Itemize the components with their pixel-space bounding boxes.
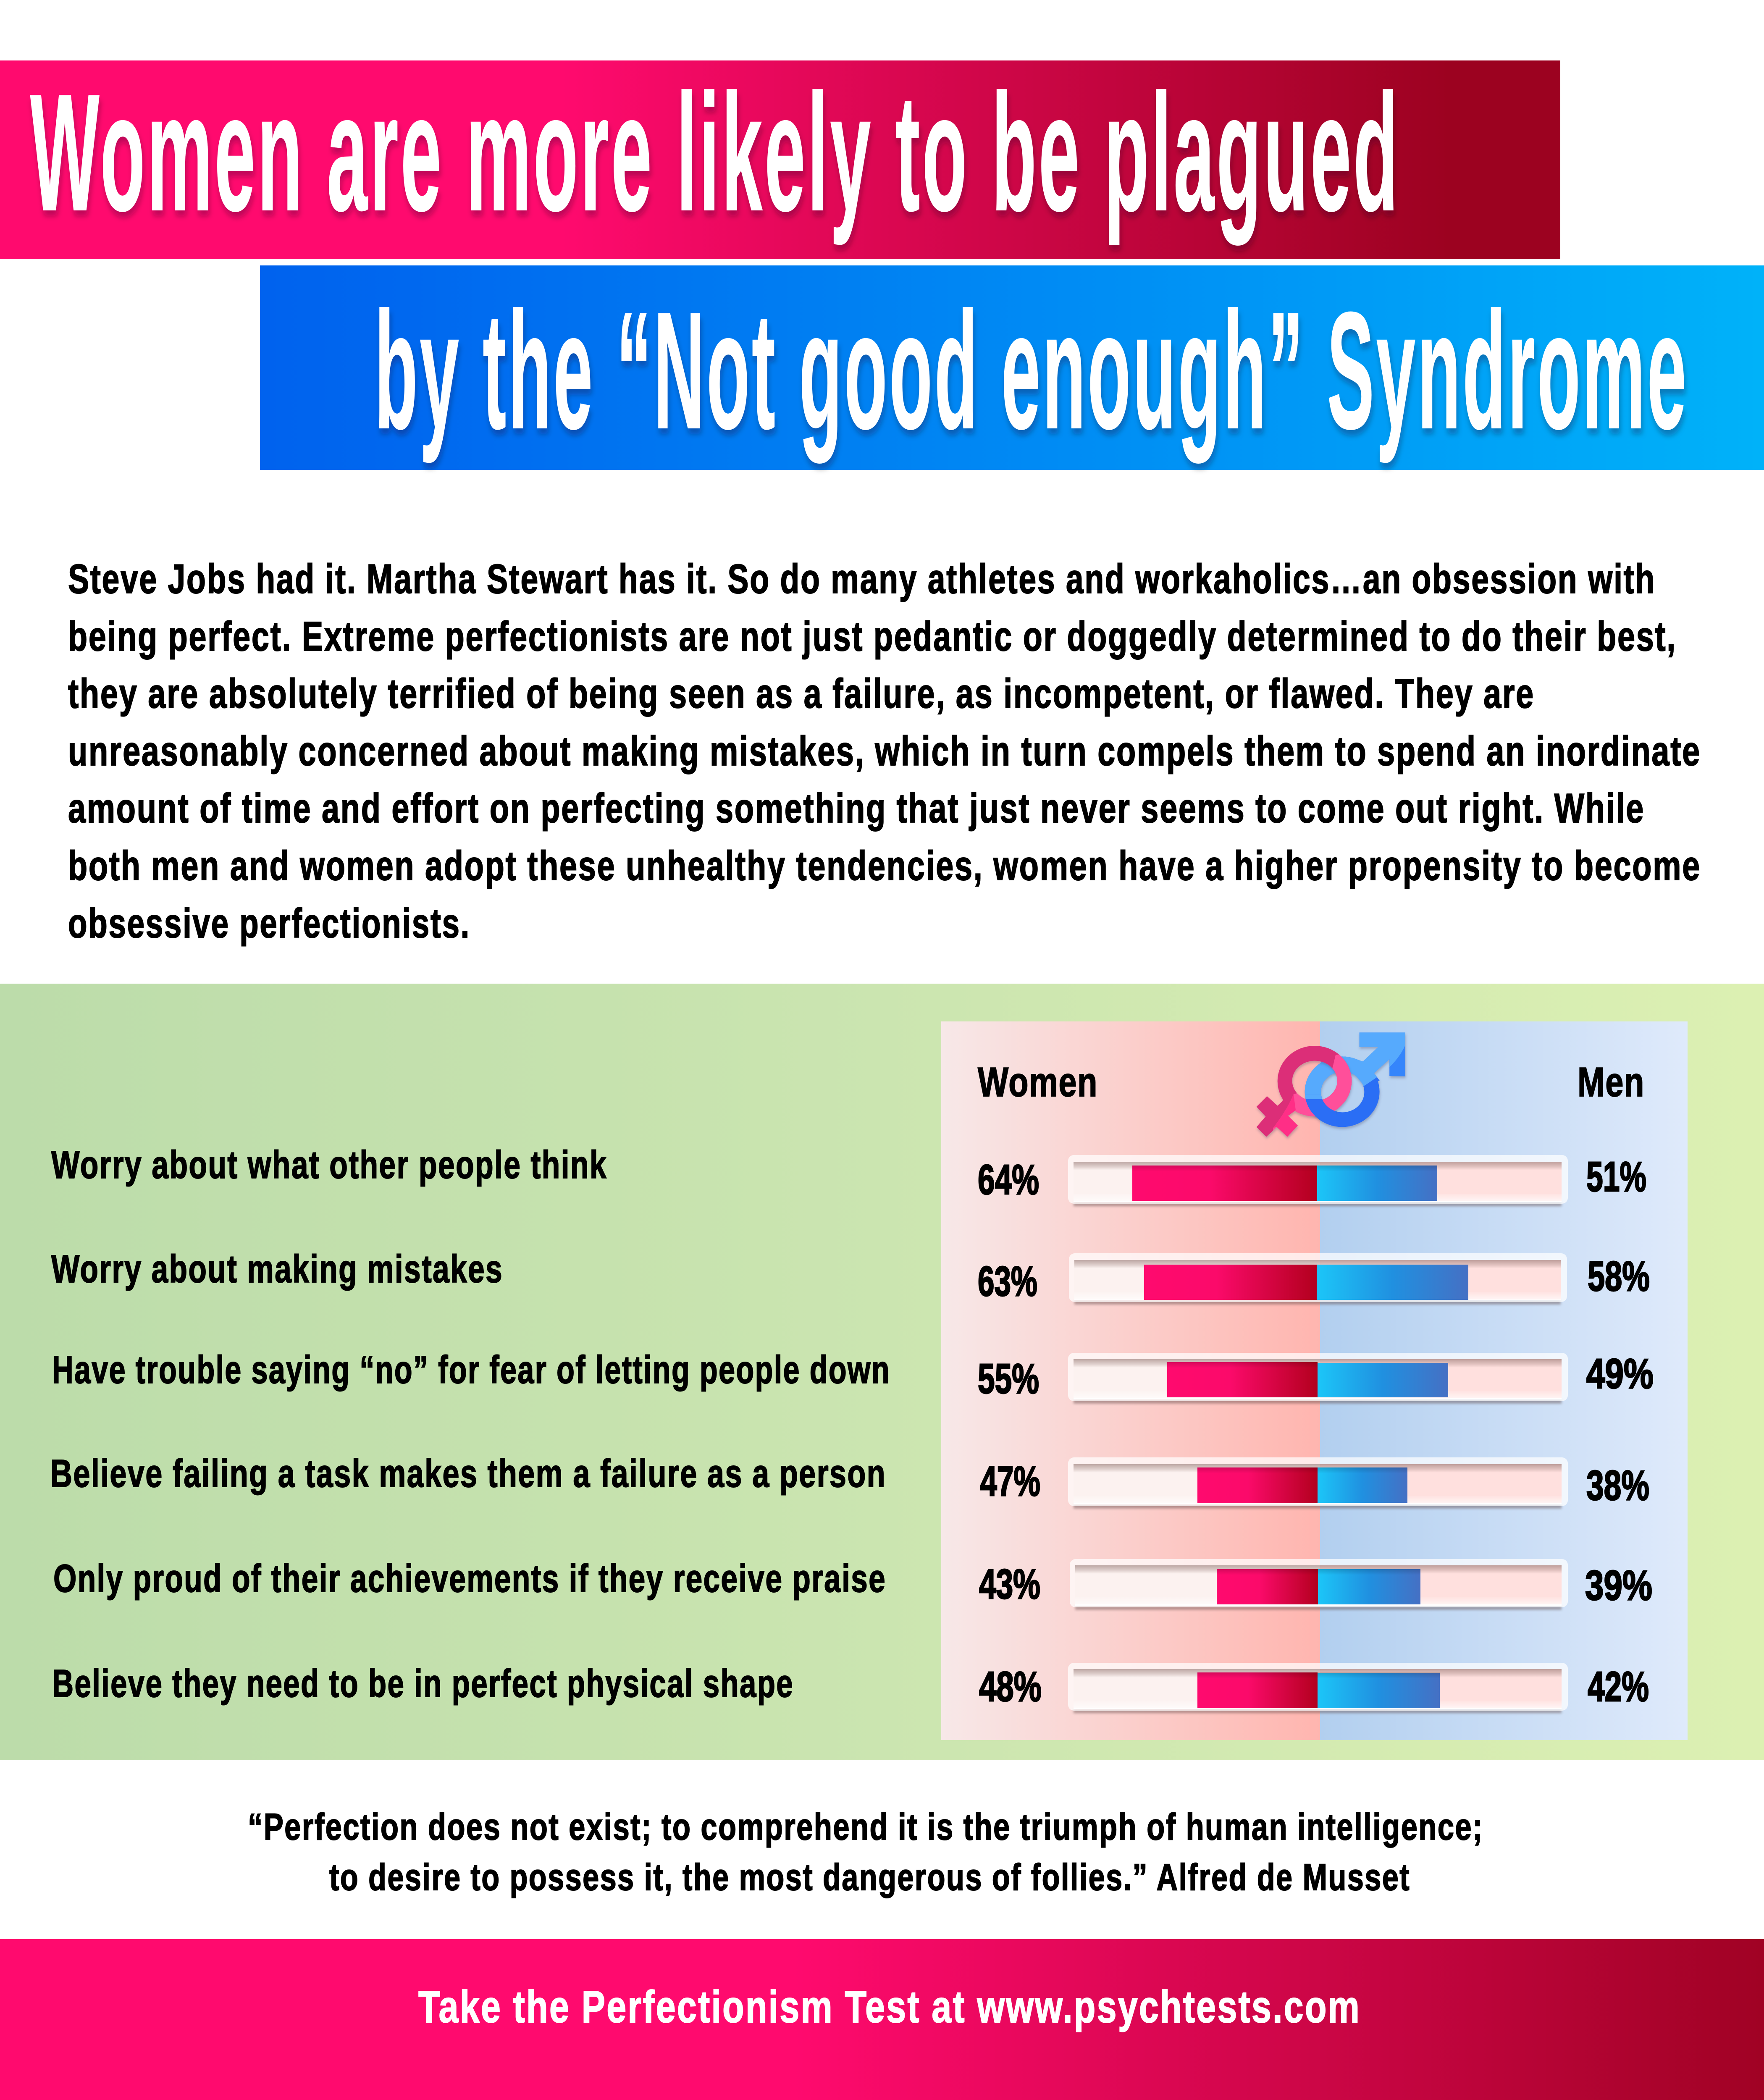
icon: interlocked female and male symbols	[1257, 1032, 1405, 1137]
women 47%: 47%	[980, 1458, 1040, 1505]
row 3: trouble saying no	[978, 1350, 1654, 1404]
intro paragraph	[68, 556, 1701, 946]
women 43%: 43%	[979, 1561, 1040, 1608]
bar 1	[1068, 1155, 1568, 1206]
quote by Alfred de Musset	[248, 1806, 1483, 1898]
men 51%: 51%	[1586, 1153, 1646, 1200]
statement labels	[50, 1143, 890, 1705]
bar 4	[1068, 1457, 1568, 1509]
women 63%: 63%	[978, 1258, 1037, 1305]
row 5: proud only with praise	[979, 1559, 1652, 1610]
quote by Alfred de Musset: “Perfection does not exist; to comprehend it is the triumph of human intelligence;	[248, 1806, 1483, 1848]
row 1: worry about what others think	[978, 1153, 1646, 1206]
intro paragraph: obsessive perfectionists.	[68, 900, 470, 946]
statement labels: Worry about making mistakes	[51, 1247, 503, 1291]
statement labels: Believe failing a task makes them a failure as a person	[50, 1452, 886, 1495]
women 64%: 64%	[978, 1156, 1039, 1203]
men 42%: 42%	[1588, 1663, 1649, 1710]
bar 6	[1068, 1663, 1568, 1713]
bar 5	[1070, 1559, 1568, 1610]
quote by Alfred de Musset: to desire to possess it, the most dangerous of follies.” Alfred de Musset	[329, 1856, 1410, 1898]
women 55%: 55%	[978, 1355, 1039, 1402]
panel: green survey section	[0, 984, 1764, 1760]
men 58%: 58%	[1588, 1253, 1650, 1300]
row 4: failing a task	[980, 1457, 1649, 1509]
bar 2	[1069, 1253, 1567, 1305]
heading: Women: Women	[978, 1059, 1098, 1105]
panel: chart background	[941, 1021, 1688, 1740]
statement labels: Worry about what other people think	[51, 1143, 607, 1186]
statement labels: Have trouble saying “no” for fear of letting people down	[52, 1348, 890, 1391]
bar 3	[1068, 1353, 1568, 1404]
statement labels: Believe they need to be in perfect physical shape	[52, 1662, 794, 1705]
footer call to action: Take the Perfectionism Test at www.psychtests.com	[418, 1981, 1361, 2032]
men 39%: 39%	[1585, 1562, 1652, 1609]
statement labels: Only proud of their achievements if they receive praise	[53, 1557, 886, 1600]
men 38%: 38%	[1586, 1462, 1649, 1509]
title banner: top line	[0, 60, 1560, 259]
title banner: bottom line	[260, 265, 1764, 470]
row 2: worry about making mistakes	[978, 1253, 1650, 1305]
women 48%: 48%	[979, 1663, 1042, 1710]
row 6: perfect physical shape	[979, 1663, 1649, 1713]
footer banner	[0, 1939, 1764, 2100]
men 49%: 49%	[1586, 1350, 1654, 1397]
heading: Men: Men	[1578, 1059, 1645, 1105]
